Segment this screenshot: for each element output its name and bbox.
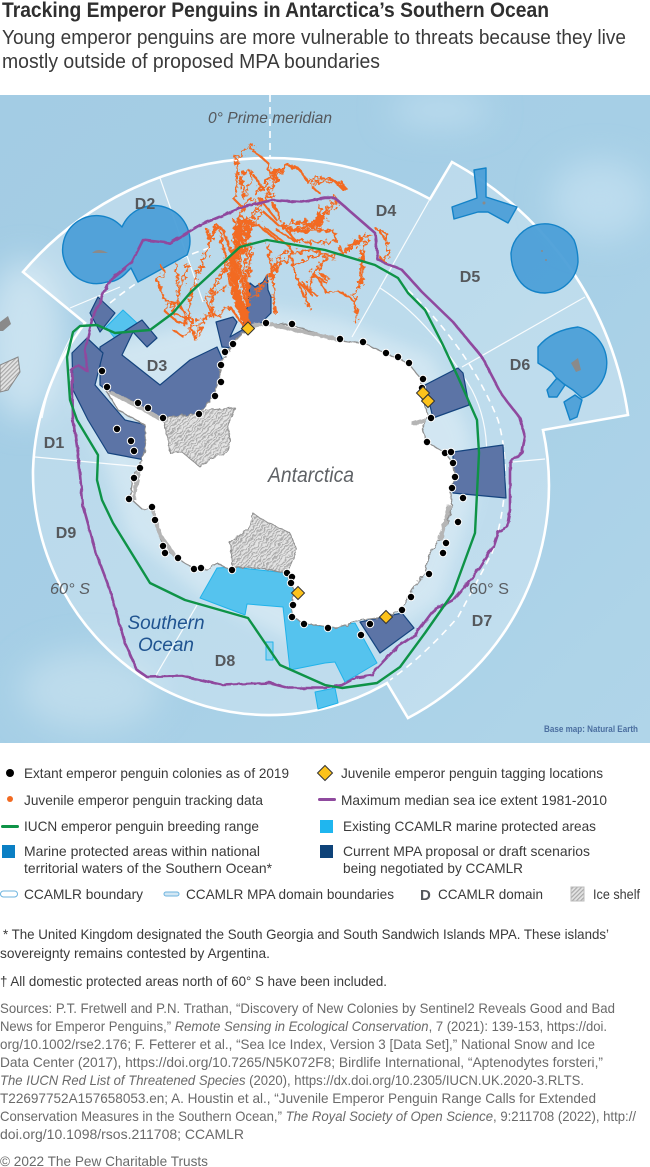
tracks west of main bundle: [157, 265, 185, 325]
sources: [0, 1000, 636, 1142]
prime meridian and 60 degrees S dashed lines: [110, 95, 505, 680]
ice shelf: Ronne-Filchner: [163, 408, 235, 467]
footnotes: * The United Kingdom designated the South Georgia and South Sandwich Islands MPA. These islands’: [3, 926, 609, 942]
tracking clusters: [270, 169, 363, 277]
sources: org/10.1002/rse2.176; F. Fetterer et al., “Sea Ice Index, Version 3 [Data Set],” National Snow and Ice: [0, 1036, 595, 1052]
ocean background: [0, 95, 650, 743]
legend: breeding range: IUCN emperor penguin breeding range: [24, 818, 259, 834]
subtitle: Young emperor penguins are more vulnerable to threats because they live: [2, 27, 626, 49]
domain boundaries: [35, 178, 585, 677]
sources: doi.org/10.1098/rsos.211708; CCAMLR: [0, 1126, 244, 1142]
legend: colonies: Extant emperor penguin colonies as of 2019: [24, 765, 289, 781]
sources: T22697752A157658053.en; A. Houstin et al., “Juvenile Emperor Penguin Range Calls for Extended: [0, 1090, 596, 1106]
legend: existing MPAs: Existing CCAMLR marine protected areas: [343, 818, 596, 834]
legend: national MPAs: [2, 843, 273, 876]
IUCN breeding range: [67, 240, 479, 688]
legend: [0, 765, 640, 904]
proposal: East Antarctica 2: [453, 445, 506, 498]
map panel: [0, 94, 650, 743]
proposal: East Antarctica 1: [425, 368, 469, 418]
MPA: Ross Sea: [200, 567, 377, 682]
legend: proposed MPAs: Current MPA proposal or draft scenarios: [343, 843, 590, 859]
domain labels: D9: [56, 525, 76, 542]
proposal: Weddell east: [216, 275, 271, 348]
domain labels: D3: [147, 358, 167, 375]
sources: News for Emperor Penguins,” Remote Sensing in Ecological Conservation, 7 (2021): 139-153, https://doi.: [0, 1018, 607, 1034]
Existing CCAMLR MPAs: [106, 310, 377, 709]
MPA: Ross Sea outlying: [315, 688, 338, 709]
domain labels: D7: [472, 613, 492, 630]
label: 60 S left: 60° S: [50, 581, 90, 598]
label: Southern Ocean: [127, 613, 205, 656]
subtitle: [2, 27, 626, 73]
label: prime meridian: 0° Prime meridian: [208, 110, 332, 127]
MPA: South Orkney: [106, 310, 137, 341]
sources: Data Center (2017), https://doi.org/10.7265/N5K072F8; Birdlife International, “Aptenodytes forsteri,”: [0, 1054, 603, 1070]
footnotes: † All domestic protected areas north of 60° S have been included.: [0, 973, 387, 989]
sources: Conservation Measures in the Southern Ocean,” The Royal Society of Open Science, 9:211708 (2022), http://: [0, 1108, 636, 1124]
proposal: East Antarctica 3: [360, 613, 414, 653]
legend: sea ice: Maximum median sea ice extent 1981-2010: [341, 792, 607, 808]
domain labels: D2: [135, 196, 155, 213]
domain labels: D6: [510, 357, 530, 374]
label: 60 S right: 60° S: [469, 581, 509, 598]
legend: tagging: Juvenile emperor penguin tagging locations: [341, 765, 603, 781]
coastal light water: [75, 305, 475, 645]
subtitle: mostly outside of proposed MPA boundaries: [2, 51, 380, 73]
Proposed MPAs: [72, 275, 506, 653]
proposal: Peninsula: [72, 338, 150, 460]
legend: MPA domain boundaries: CCAMLR MPA domain boundaries: [186, 886, 394, 902]
proposal: small polygon: [90, 297, 115, 332]
MPA: D5 circle: [511, 224, 578, 293]
legend: national MPAs: territorial waters of the Southern Ocean*: [24, 860, 273, 876]
domain labels: D4: [376, 203, 396, 220]
label: Southern Ocean: Southern: [127, 613, 205, 634]
sources: Sources: P.T. Fretwell and P.N. Trathan, “Discovery of New Colonies by Sentinel2 Reveals Good and Bad: [0, 1000, 615, 1016]
legend: domain: CCAMLR domain: [438, 886, 543, 902]
CCAMLR boundary: [23, 158, 628, 718]
legend: proposed MPAs: being negotiated by CCAMLR: [343, 860, 523, 876]
legend: domain: D: [420, 887, 431, 904]
ice shelf: coast: [110, 323, 450, 556]
label: Southern Ocean: Ocean: [138, 635, 194, 656]
island specks: [0, 202, 581, 392]
ice shelf: Ross: [230, 513, 297, 573]
domain labels: [44, 196, 530, 670]
domain labels: D1: [44, 435, 64, 452]
domain labels: D5: [460, 269, 480, 286]
footnotes: sovereignty remains contested by Argentina.: [0, 945, 270, 961]
colonies: [98, 319, 467, 639]
tagging locations: [242, 322, 434, 624]
legend: tracking: Juvenile emperor penguin tracking data: [24, 792, 263, 808]
legend: proposed MPAs: [320, 843, 590, 876]
MPA: D2: [63, 206, 190, 284]
proposal: Weddell Sea: [100, 320, 225, 420]
maximum sea ice extent: [72, 198, 525, 688]
domain labels: D8: [215, 653, 235, 670]
Antarctica land: [106, 323, 455, 628]
MPA: D6: [538, 327, 607, 398]
juvenile penguin tracking data: [157, 144, 388, 340]
legend: boundary: CCAMLR boundary: [24, 886, 143, 902]
label: Antarctica: Antarctica: [266, 464, 354, 487]
Marine protected areas in national waters: [63, 168, 607, 420]
sources: The IUCN Red List of Threatened Species (2020), https://dx.doi.org/10.2305/IUCN.UK.2020-3.RLTS.: [0, 1072, 584, 1088]
legend: ice shelf: [571, 886, 640, 902]
legend: national MPAs: Marine protected areas within national: [24, 843, 260, 859]
MPA: Y shape: [452, 168, 517, 223]
legend: ice shelf: Ice shelf: [593, 886, 640, 902]
footnotes: [0, 926, 609, 989]
